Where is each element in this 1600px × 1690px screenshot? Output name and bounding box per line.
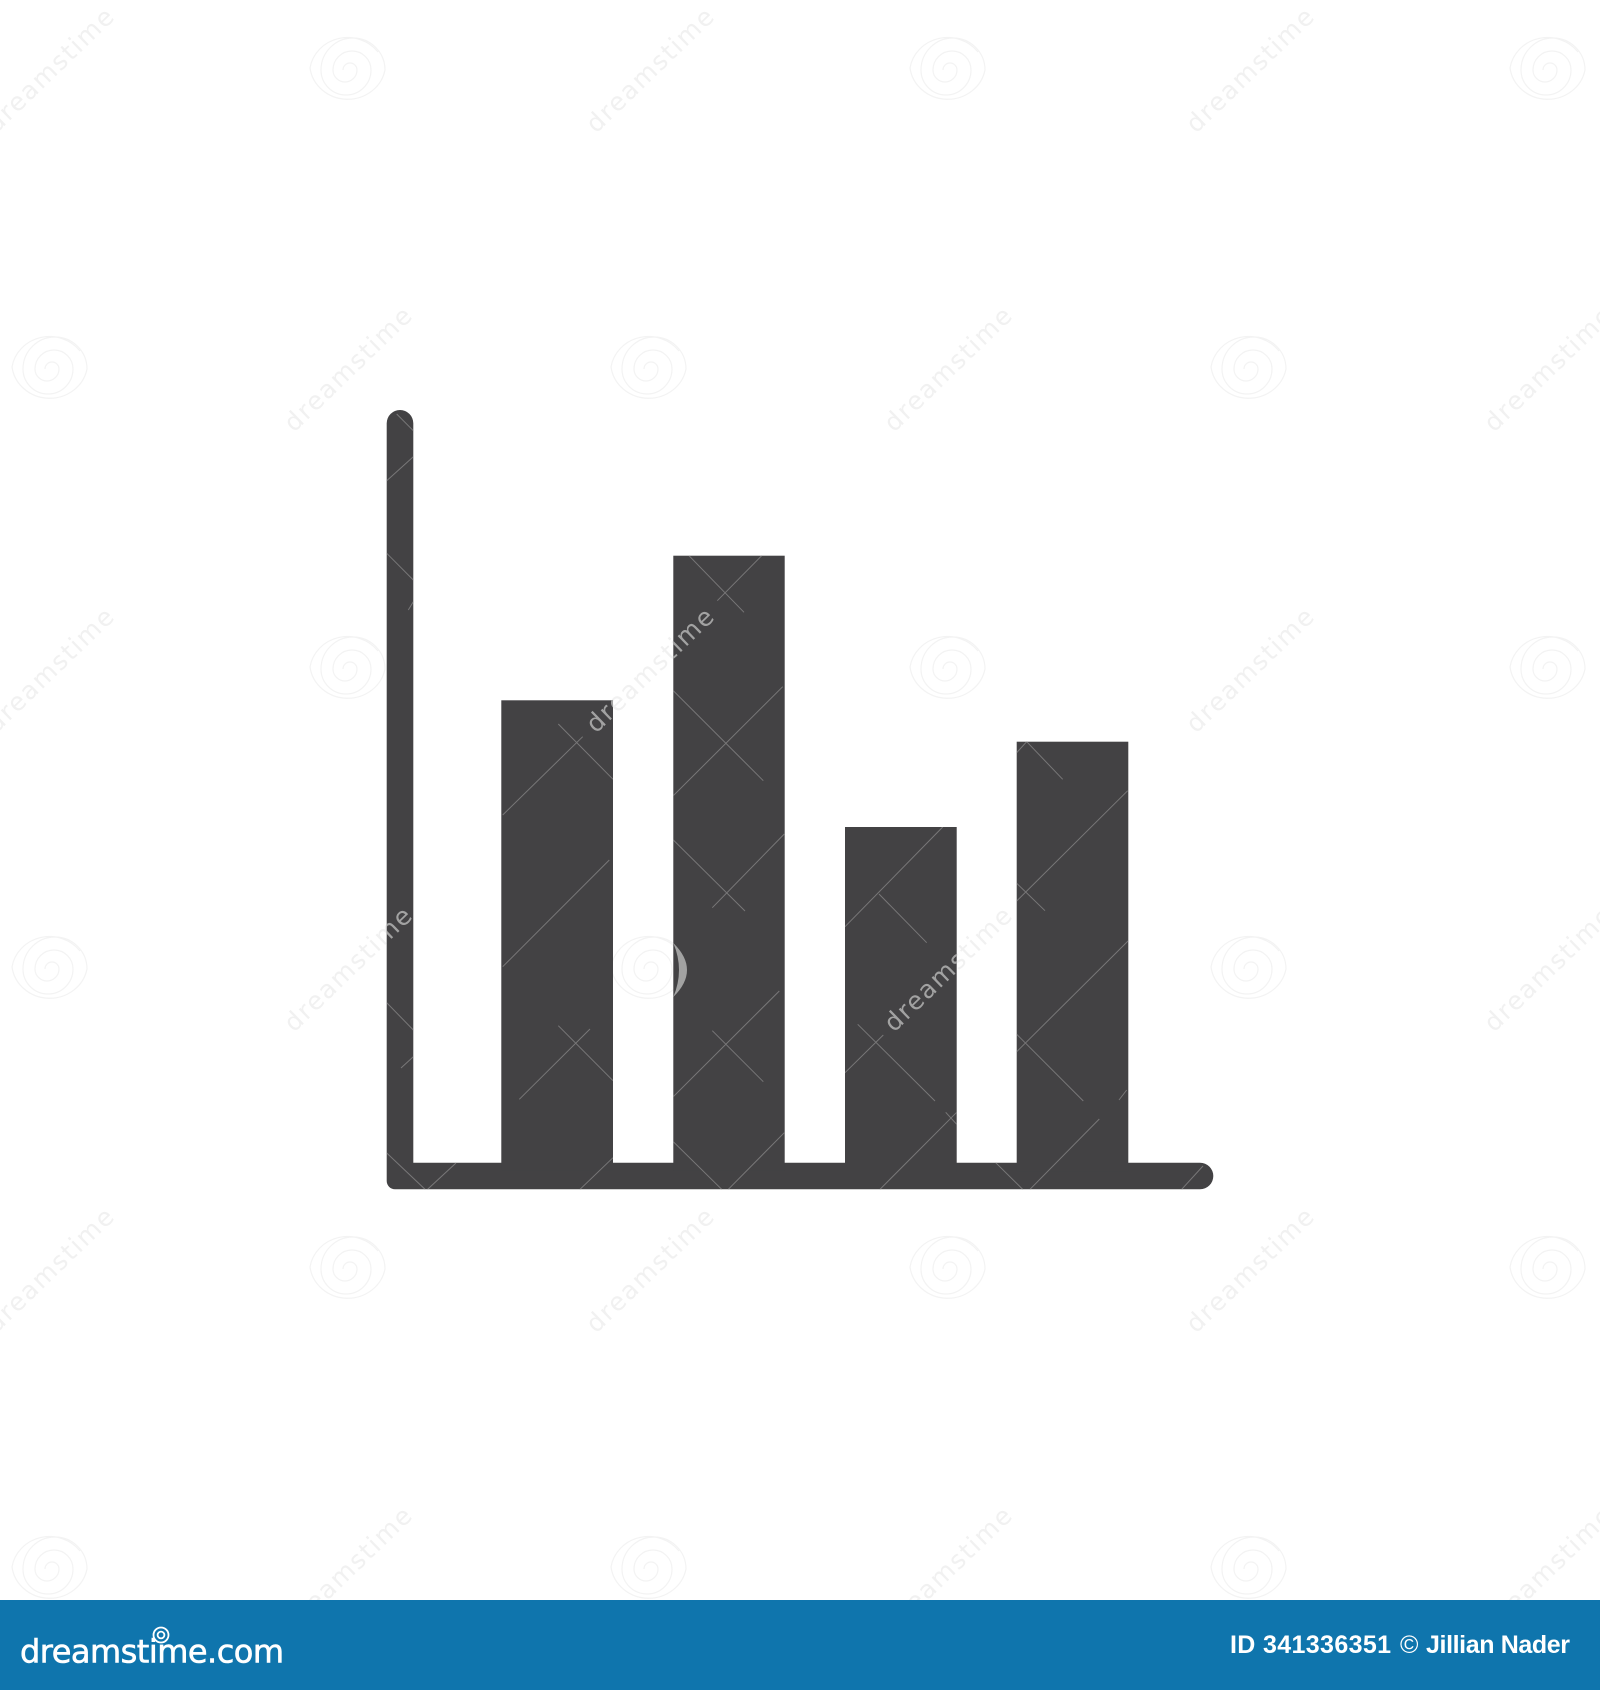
watermark text over chart: dreamstime	[278, 901, 418, 1037]
bar 1	[501, 700, 613, 1170]
watermark pattern: dreamstime	[278, 1501, 418, 1637]
image id and author: ID 341336351	[1230, 1631, 1391, 1659]
watermark pattern: dreamstime	[1180, 602, 1320, 738]
watermark pattern: dreamstime	[878, 901, 1018, 1037]
image id and author: Jillian Nader	[1426, 1631, 1570, 1659]
watermark pattern: dreamstime	[1180, 2, 1320, 138]
watermark pattern: dreamstime	[1180, 1202, 1320, 1338]
watermark pattern: dreamstime	[580, 2, 720, 138]
watermark text over chart	[386, 612, 956, 1030]
watermark lines over chart	[387, 414, 1203, 1189]
bar chart icon	[387, 410, 1213, 1189]
watermark text over chart: dreamstime	[878, 901, 1018, 1037]
watermark text over chart: dreamstime	[580, 602, 720, 738]
watermark pattern: dreamstime	[278, 901, 418, 1037]
watermark pattern: dreamstime	[878, 1501, 1018, 1637]
watermark pattern: dreamstime	[278, 301, 418, 437]
logo text: dreamstime.com	[20, 1632, 284, 1670]
footer banner	[0, 1600, 1600, 1690]
watermark pattern: dreamstime	[580, 602, 720, 738]
logo spiral icon	[154, 1628, 168, 1642]
watermark pattern: dreamstime	[878, 301, 1018, 437]
bar 2	[673, 556, 785, 1171]
chart axes	[387, 410, 1213, 1189]
bar 3	[845, 827, 957, 1172]
image id and author: ©	[1400, 1631, 1419, 1659]
watermark pattern: dreamstime	[580, 1202, 720, 1338]
bar 4	[1017, 742, 1128, 1172]
